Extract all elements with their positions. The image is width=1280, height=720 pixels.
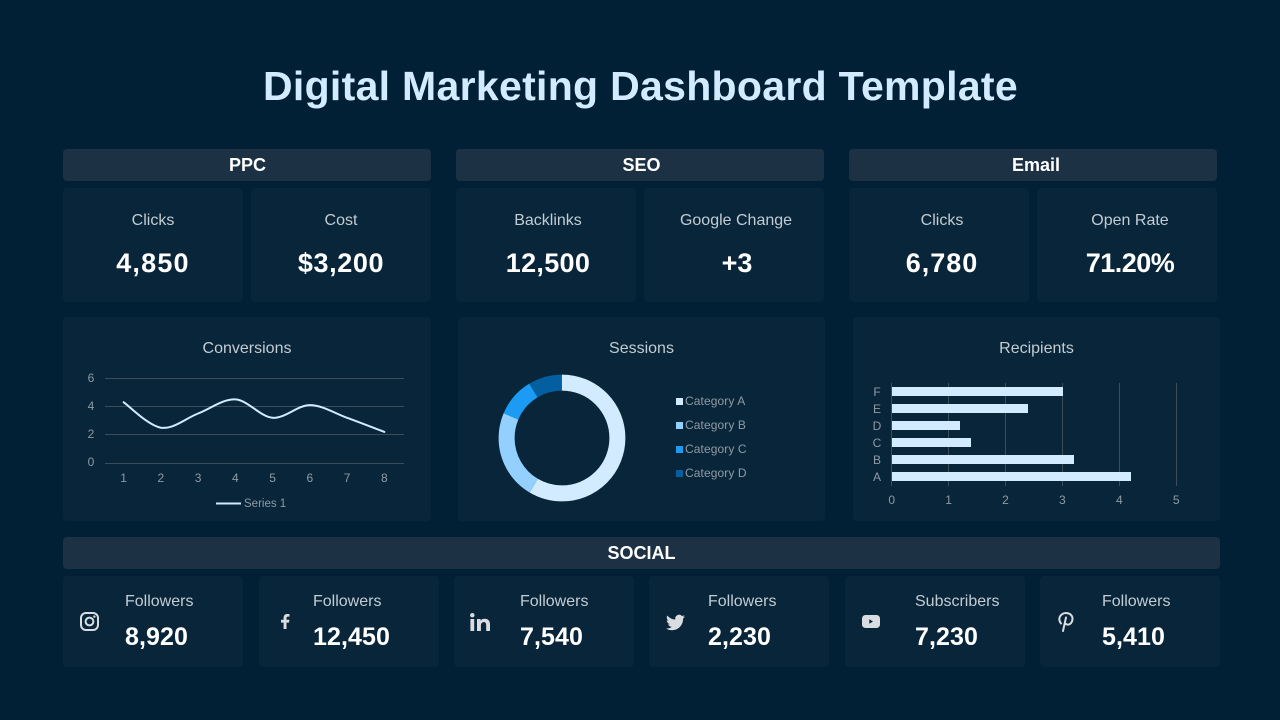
metric: email clicks: Clicks	[921, 212, 963, 229]
bar chart: 4	[1116, 493, 1123, 507]
line chart: 3	[195, 471, 202, 485]
bar chart: 0	[888, 493, 895, 507]
metric: Google change: Google Change	[680, 212, 792, 229]
metric: open rate	[1037, 188, 1217, 302]
metric: email clicks	[849, 188, 1029, 302]
icon: Instagram	[80, 612, 99, 631]
icon: LinkedIn	[470, 613, 490, 631]
bar chart: B	[873, 453, 881, 467]
title: Digital Marketing Dashboard Template	[263, 63, 1018, 109]
donut chart: Category C	[685, 442, 747, 456]
icon: Pinterest	[1058, 612, 1074, 632]
metric: Google change	[644, 188, 824, 302]
heading: SOCIAL	[63, 537, 1220, 569]
metric: open rate: Open Rate	[1091, 212, 1169, 229]
metric: Facebook: Followers	[313, 593, 381, 610]
metric: YouTube: 7,230	[915, 623, 978, 651]
line chart: 1	[120, 471, 127, 485]
metric: backlinks: Backlinks	[514, 212, 582, 229]
metric: Twitter: Followers	[708, 593, 776, 610]
metric: LinkedIn: 7,540	[520, 623, 583, 651]
panel: Recipients bar chart	[853, 317, 1220, 521]
line chart: Series 1	[244, 498, 286, 510]
icon: Twitter	[666, 614, 685, 630]
metric: LinkedIn	[454, 576, 634, 667]
metric: Facebook: 12,450	[313, 623, 390, 651]
chart title: Sessions: Sessions	[609, 340, 674, 357]
heading: Email	[849, 149, 1217, 181]
line chart: 5	[269, 471, 276, 485]
chart title: Recipients: Recipients	[999, 340, 1074, 357]
heading: SOCIAL: SOCIAL	[607, 543, 676, 563]
line chart: 7	[344, 471, 351, 485]
metric: LinkedIn: Followers	[520, 593, 588, 610]
metric: backlinks: 12,500	[506, 248, 590, 278]
bar chart: D	[873, 419, 882, 433]
metric: Pinterest: Followers	[1102, 593, 1170, 610]
bar chart: 3	[1059, 493, 1066, 507]
metric: PPC clicks	[63, 188, 243, 302]
heading: SEO	[456, 149, 824, 181]
metric: Instagram: 8,920	[125, 623, 188, 651]
line chart: 6	[88, 371, 95, 385]
bar chart: A	[873, 470, 881, 484]
metric: Google change: +3	[722, 248, 752, 278]
panel: Conversions line chart	[63, 317, 431, 521]
line chart: 4	[88, 399, 95, 413]
metric: Instagram: Followers	[125, 593, 193, 610]
metric: PPC cost: Cost	[325, 212, 357, 229]
heading: PPC: PPC	[229, 155, 266, 175]
bar chart: E	[873, 402, 881, 416]
metric: open rate: 71.20%	[1086, 248, 1174, 278]
bar chart: 2	[1002, 493, 1009, 507]
line chart: 2	[88, 427, 95, 441]
line chart: 6	[307, 471, 314, 485]
metric: Twitter	[649, 576, 829, 667]
line chart: 4	[232, 471, 239, 485]
bar chart: 1	[945, 493, 952, 507]
metric: Pinterest	[1040, 576, 1220, 667]
metric: YouTube	[845, 576, 1025, 667]
line chart: 8	[381, 471, 388, 485]
donut chart: Category A	[685, 394, 745, 408]
donut chart: Category D	[685, 466, 747, 480]
metric: PPC cost	[251, 188, 431, 302]
icon: Facebook	[281, 614, 290, 629]
metric: email clicks: 6,780	[906, 248, 978, 278]
panel: Sessions donut chart	[458, 317, 825, 521]
metric: backlinks	[456, 188, 636, 302]
metric: Facebook	[259, 576, 439, 667]
metric: YouTube: Subscribers	[915, 593, 999, 610]
line chart: 0	[88, 455, 95, 469]
line chart: 2	[158, 471, 165, 485]
donut chart: Category B	[685, 418, 746, 432]
metric: PPC cost: $3,200	[298, 248, 384, 278]
bar chart: C	[873, 436, 882, 450]
chart title: Conversions: Conversions	[203, 340, 291, 357]
heading: SEO: SEO	[622, 155, 660, 175]
heading: Email: Email	[1012, 155, 1060, 175]
bar chart: F	[873, 385, 881, 399]
icon: YouTube	[862, 615, 880, 628]
metric: Instagram	[63, 576, 243, 667]
heading: PPC	[63, 149, 431, 181]
metric: PPC clicks: Clicks	[132, 212, 174, 229]
metric: Twitter: 2,230	[708, 623, 771, 651]
bar chart: 5	[1173, 493, 1180, 507]
metric: PPC clicks: 4,850	[116, 248, 190, 278]
metric: Pinterest: 5,410	[1102, 623, 1165, 651]
